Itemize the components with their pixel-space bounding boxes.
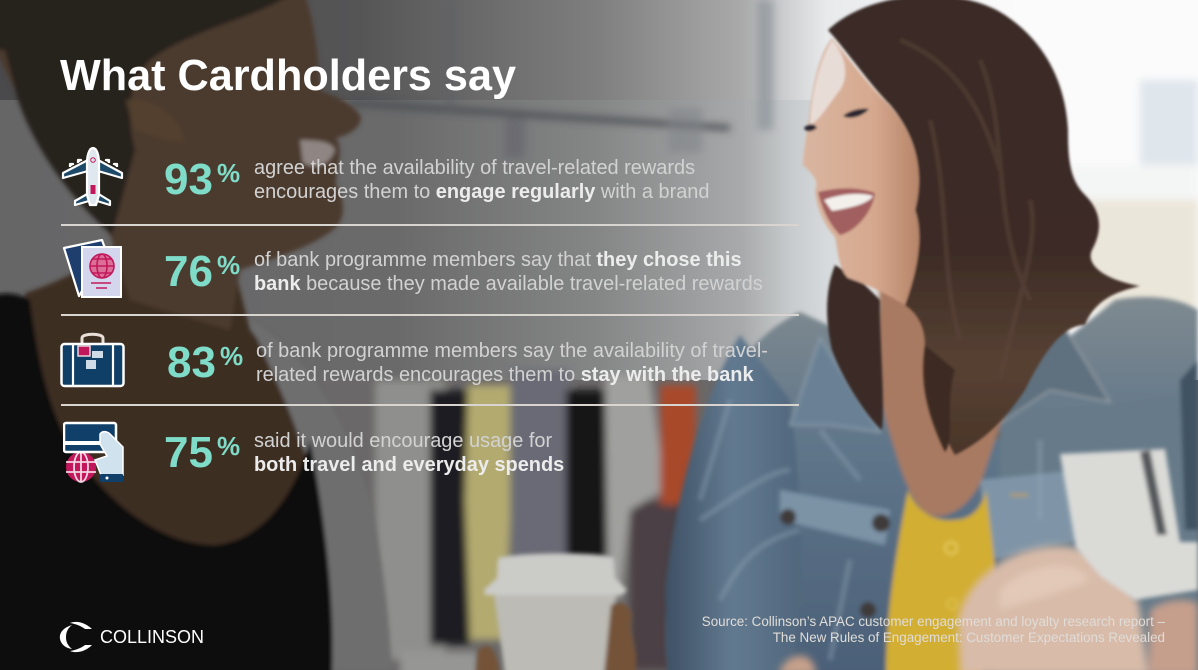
row 2: chose this bank — [62, 239, 763, 298]
window and far-right wall — [1140, 80, 1198, 170]
left woman: mouth — [300, 140, 335, 166]
row 3: stay with the bank — [60, 332, 768, 388]
stat: 93%: 93% — [164, 155, 240, 204]
text: 76% description: of bank programme members say that they chose this — [254, 249, 742, 271]
logo: Collinson — [60, 622, 204, 652]
icon: airplane — [62, 146, 124, 206]
source note — [702, 614, 1165, 645]
left woman: ear — [125, 99, 185, 141]
icon: passport — [62, 239, 122, 298]
text: 76% description: bank because they made available travel-related rewards — [254, 273, 763, 295]
source note: Source: Collinson’s APAC customer engagement and loyalty research report – — [702, 614, 1165, 629]
icon: logo mark — [60, 622, 92, 652]
ceiling details — [350, 103, 730, 128]
plastic card — [1060, 449, 1198, 600]
row 4: usage for travel and everyday spends — [63, 422, 564, 483]
title: What Cardholders say — [60, 52, 516, 100]
left woman: black top — [0, 294, 333, 670]
text: 93% description: encourages them to engage regularly with a brand — [254, 181, 709, 203]
jacket buttons — [780, 509, 890, 618]
text: 83% description: related rewards encourages them to stay with the bank — [256, 364, 754, 386]
clothes rack — [630, 500, 685, 670]
hands around cup — [476, 603, 636, 670]
left woman: cardigan — [250, 320, 392, 670]
left woman: chest and neck — [0, 235, 340, 560]
text: 83% description: of bank programme members say the availability of travel- — [256, 340, 768, 362]
neck and chest skin — [876, 240, 1010, 516]
text: 75% description: said it would encourage usage for — [254, 430, 552, 452]
text: 83% description — [256, 340, 768, 386]
left woman: head — [0, 0, 361, 330]
right woman: face — [803, 38, 919, 305]
hand holding card, foreground — [958, 546, 1148, 670]
text: 93% description — [254, 157, 709, 203]
icon: card, hand and globe — [63, 422, 124, 483]
text: 75% description: both travel and everyday spends — [254, 454, 564, 476]
stat: 75%: 75% — [164, 428, 240, 477]
row 1: travel rewards engagement — [62, 146, 709, 467]
stat: 83%: 83% — [167, 338, 243, 387]
text: 93% description: agree that the availability of travel-related rewards — [254, 157, 695, 179]
stat: 76%: 76% — [164, 247, 240, 296]
text: 75% description — [254, 430, 564, 476]
logo wordmark: COLLINSON — [100, 627, 204, 647]
yellow top — [886, 490, 1000, 670]
coffee cup — [484, 554, 627, 595]
source note: The New Rules of Engagement: Customer Expectations Revealed — [773, 630, 1165, 645]
right woman: hair — [828, 0, 1140, 455]
icon: suitcase — [60, 332, 125, 388]
right woman: denim jacket — [665, 297, 1198, 670]
text: 76% description — [254, 249, 763, 295]
right woman: eyes — [804, 109, 869, 131]
right woman: mouth — [818, 188, 875, 235]
